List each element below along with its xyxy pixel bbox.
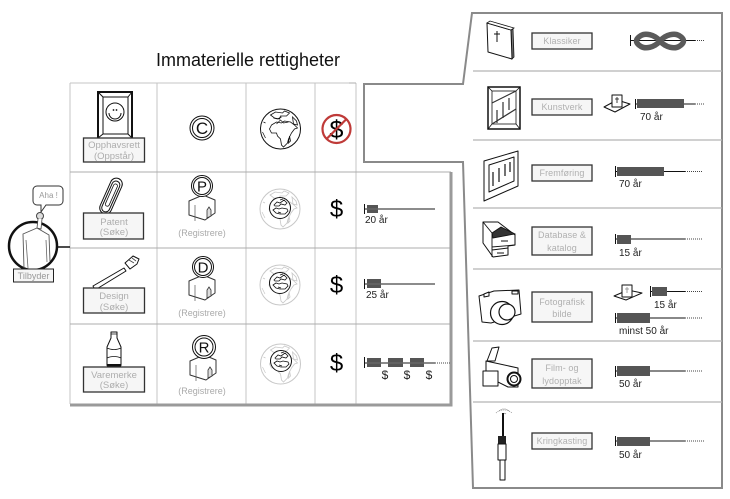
icon: video camera — [483, 347, 520, 387]
timeline: 70 år: 70 år — [640, 111, 663, 123]
timeline: minst 50 år — [616, 313, 703, 337]
title: Immaterielle rettigheter — [156, 50, 340, 70]
icon: no dollar: $ — [330, 116, 344, 144]
row: Kringkasting — [496, 409, 704, 480]
label: Fremføring — [532, 165, 592, 181]
icon: bible — [487, 21, 514, 59]
icon: book on plinth — [604, 95, 630, 112]
icon: card file — [483, 222, 515, 257]
timeline: 70 år — [616, 166, 702, 190]
icon: registered trademark: R — [199, 340, 210, 356]
icon: framed smiley — [98, 92, 132, 140]
label: Opphavsrett: Opphavsrett — [88, 140, 140, 151]
label: Design: Design — [99, 291, 129, 302]
icon: paper clip — [98, 176, 124, 216]
icon: toothbrush — [93, 256, 139, 290]
icon: book on plinth — [614, 285, 642, 300]
timeline: 70 år: 70 år — [619, 178, 642, 190]
timeline: renewable trademark: $ — [382, 368, 389, 382]
icon: regional globe — [260, 344, 300, 384]
timeline: renewable trademark: $ — [404, 368, 411, 382]
timeline: 15 år — [616, 234, 702, 259]
label: Fotografisk bilde: bilde — [552, 309, 572, 319]
label: Tilbyder: Tilbyder — [18, 271, 49, 281]
label: Opphavsrett — [84, 138, 144, 162]
timeline: 70 år — [636, 99, 705, 123]
icon: projected art — [484, 151, 518, 201]
icon: bottle — [107, 332, 121, 367]
icon: globe — [260, 109, 300, 149]
panel: outline of work categories callout — [364, 13, 722, 488]
icon: dollar: $ — [330, 196, 343, 223]
label: Patent — [84, 213, 144, 239]
label: Kringkasting: Kringkasting — [537, 436, 587, 446]
icon: camera — [479, 290, 521, 324]
icon: dollar: $ — [330, 350, 343, 377]
row: Film- og lydopptak — [483, 347, 703, 390]
icon: framed art — [488, 87, 520, 129]
row: Fotografisk bilde — [479, 285, 703, 337]
row: Klassiker — [487, 21, 705, 59]
panel: rights table — [70, 83, 451, 405]
label: Klassiker — [532, 33, 592, 49]
timeline: minst 50 år: minst 50 år — [619, 325, 669, 337]
text: Registrere: (Registrere) — [178, 228, 226, 238]
timeline: 50 år — [616, 436, 704, 461]
label: Varemerke: (Søke) — [100, 380, 128, 391]
callout: Aha: Aha ! — [39, 191, 58, 200]
timeline: 50 år: 50 år — [619, 378, 642, 390]
icon: dollar: $ — [330, 272, 343, 299]
label: Patent: Patent — [100, 217, 128, 228]
label: Film- og lydopptak — [532, 359, 592, 388]
icon: broadcast mast — [496, 409, 512, 480]
label: Design — [84, 288, 144, 313]
label: Fotografisk bilde — [532, 292, 592, 322]
timeline: 50 år: 50 år — [619, 449, 642, 461]
icon: person in circle — [9, 212, 57, 270]
label: Fremføring: Fremføring — [539, 168, 585, 178]
icon: registered design: D — [198, 260, 209, 276]
text: Registrere: (Registrere) — [178, 386, 226, 396]
label: Kunstverk — [532, 99, 592, 115]
row: Varemerke — [84, 332, 451, 396]
timeline: 20 år — [364, 204, 435, 226]
text: Registrere: (Registrere) — [178, 308, 226, 318]
timeline: 15 år: 15 år — [654, 299, 677, 311]
timeline: infinity — [630, 34, 705, 48]
label: Film- og lydopptak: lydopptak — [542, 376, 582, 386]
label: Design: (Søke) — [100, 302, 128, 313]
timeline: 15 år — [650, 286, 702, 311]
icon: copyright symbol: C — [196, 119, 208, 138]
icon: regional globe — [260, 265, 300, 305]
timeline: 15 år: 15 år — [619, 247, 642, 259]
icon: copyright symbol — [190, 116, 214, 140]
label: Fotografisk bilde: Fotografisk — [539, 297, 585, 307]
icon: registered patent: P — [197, 178, 207, 196]
timeline: 20 år: 20 år — [365, 214, 388, 226]
label: Klassiker: Klassiker — [543, 36, 581, 46]
figure: Tilbyder — [9, 186, 70, 282]
row: Design — [84, 256, 435, 318]
icon: no dollar — [322, 115, 350, 144]
icon: registered patent — [189, 176, 215, 221]
icon: registered design — [189, 256, 215, 301]
timeline: renewable trademark: $ — [426, 368, 433, 382]
row: Fremføring — [484, 151, 702, 201]
row: Patent — [84, 176, 435, 239]
label: Opphavsrett: (Oppstår) — [94, 151, 134, 162]
row: Database & katalog — [483, 222, 702, 259]
label: Database & katalog: katalog — [547, 243, 577, 253]
label: Kringkasting — [532, 433, 592, 449]
label: Database & katalog — [532, 227, 592, 255]
row: Opphavsrett — [84, 92, 350, 162]
label: Kunstverk: Kunstverk — [542, 102, 583, 112]
label: Varemerke — [84, 367, 144, 392]
label: Database & katalog: Database & — [538, 230, 586, 240]
label: Patent: (Søke) — [100, 227, 128, 238]
timeline: 50 år — [616, 366, 703, 390]
timeline: renewable trademark — [364, 357, 451, 382]
icon: regional globe — [260, 189, 300, 229]
timeline: 25 år: 25 år — [366, 289, 389, 301]
label: Film- og lydopptak: Film- og — [545, 363, 579, 373]
label: Varemerke: Varemerke — [91, 370, 137, 381]
row: Kunstverk — [488, 87, 705, 129]
timeline: 25 år — [364, 279, 435, 301]
icon: registered trademark — [190, 336, 216, 381]
